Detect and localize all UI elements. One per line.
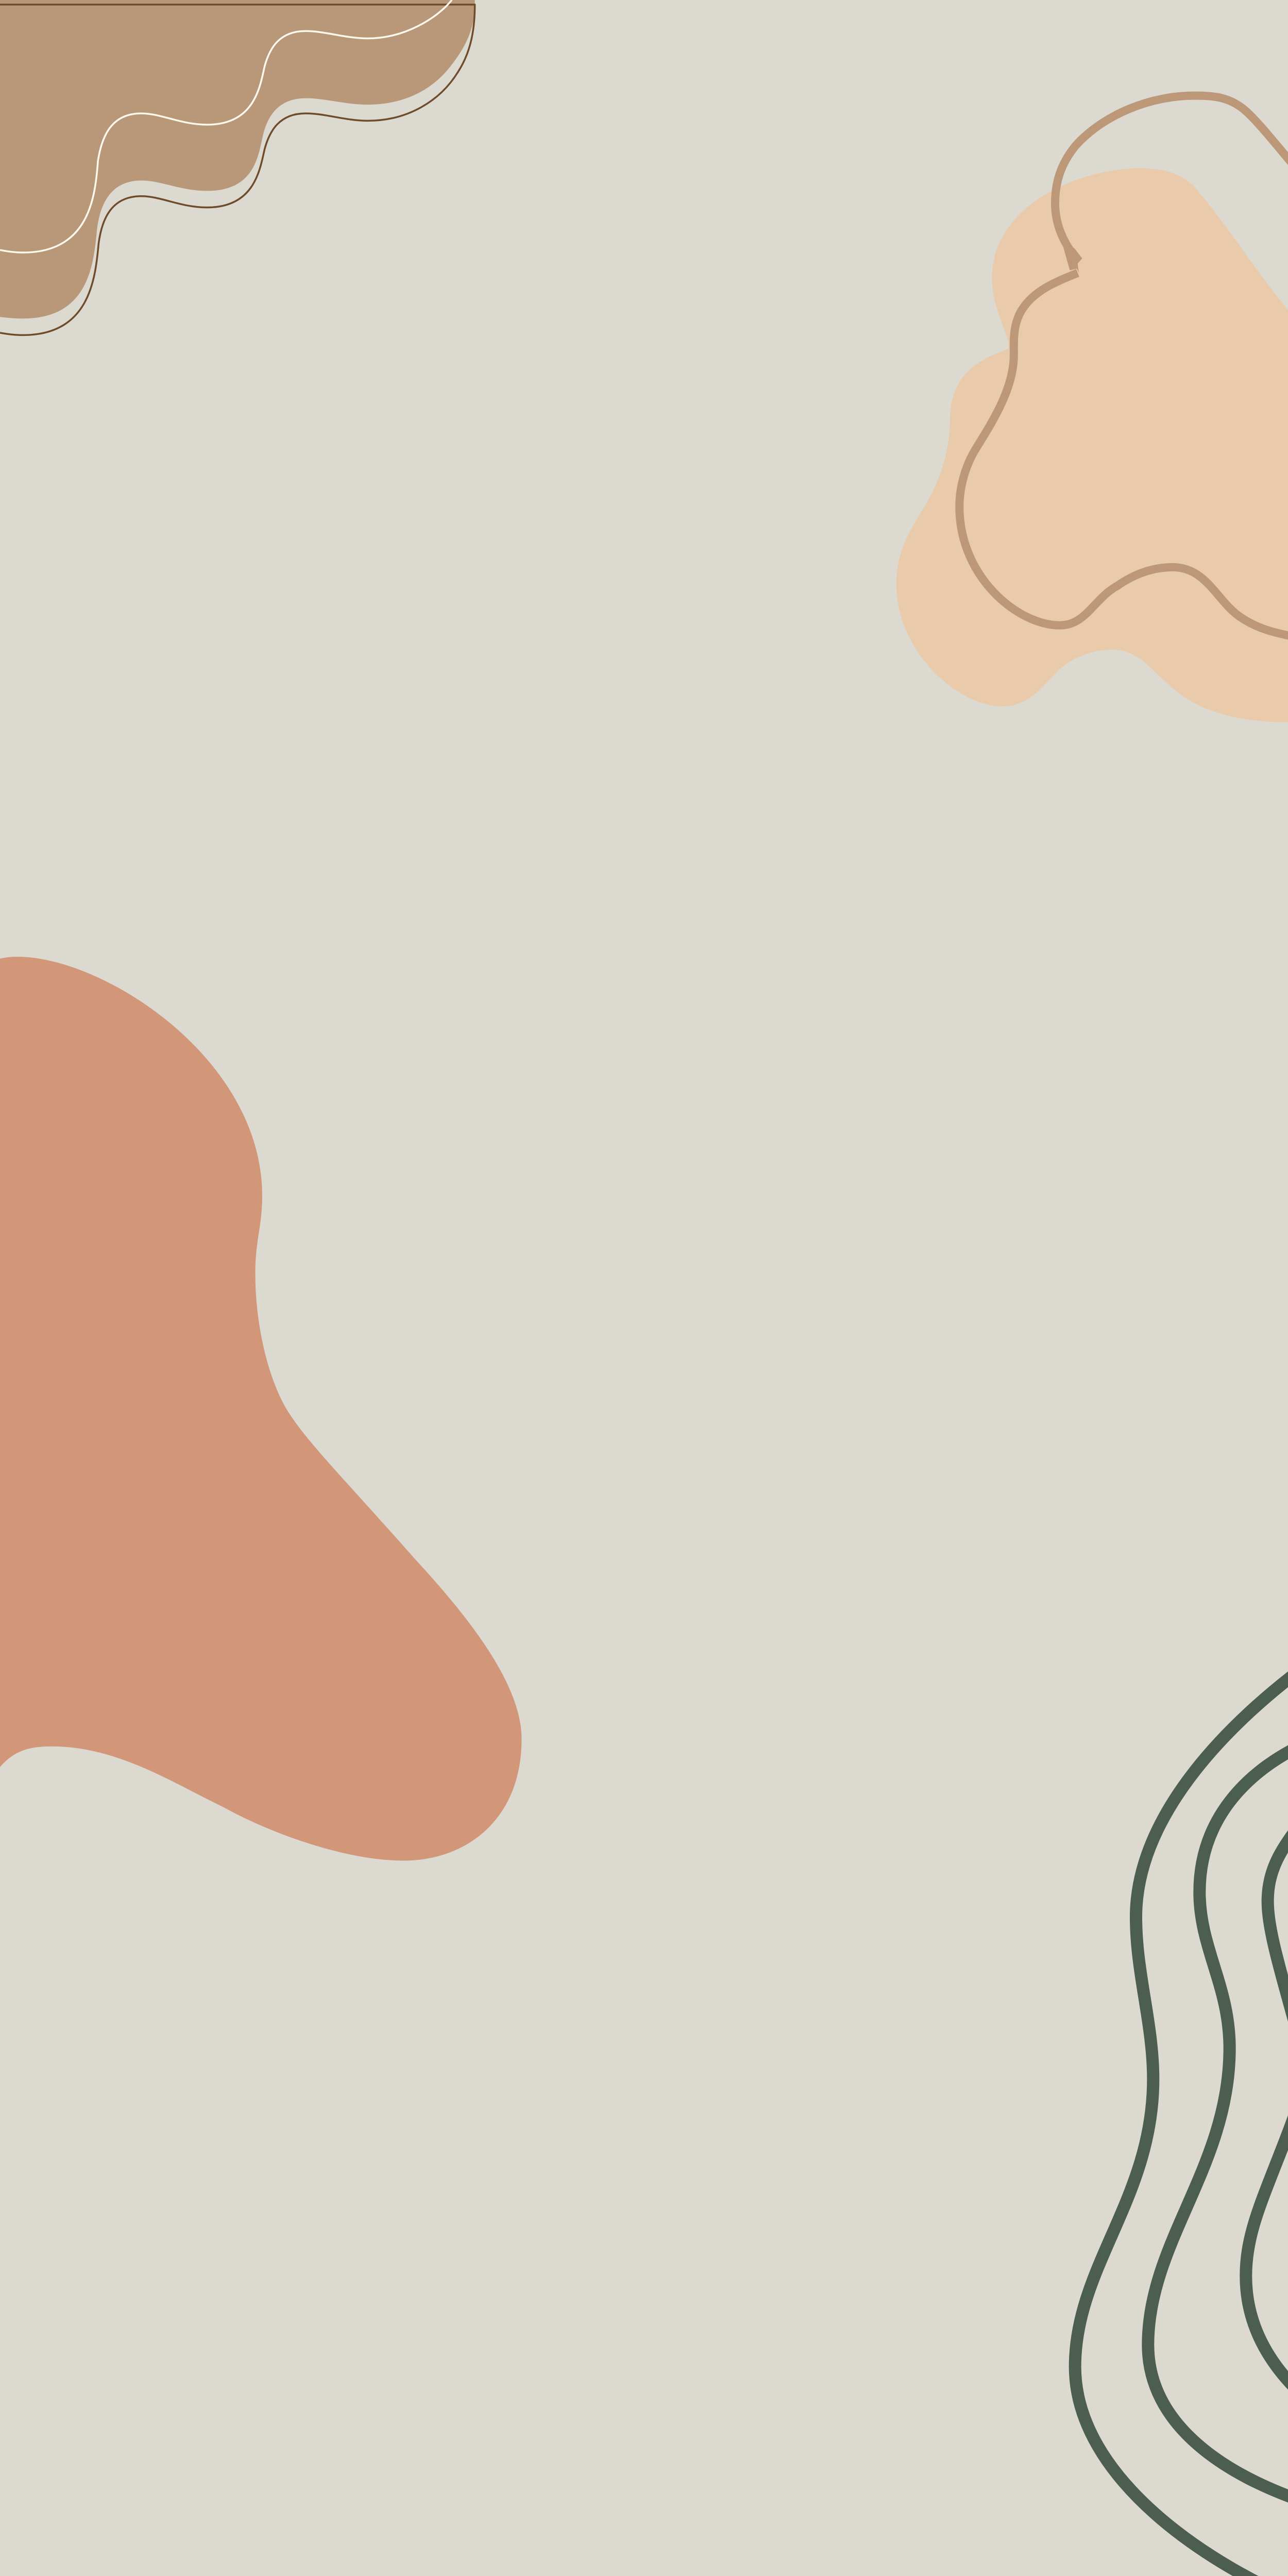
shape: top-left tan wave with outlines (0, 0, 475, 335)
shape: right green contour lines (1075, 1666, 1288, 2576)
shape: top-right peach blob with tan outline (896, 96, 1288, 722)
shape: left salmon blob (0, 957, 521, 1860)
